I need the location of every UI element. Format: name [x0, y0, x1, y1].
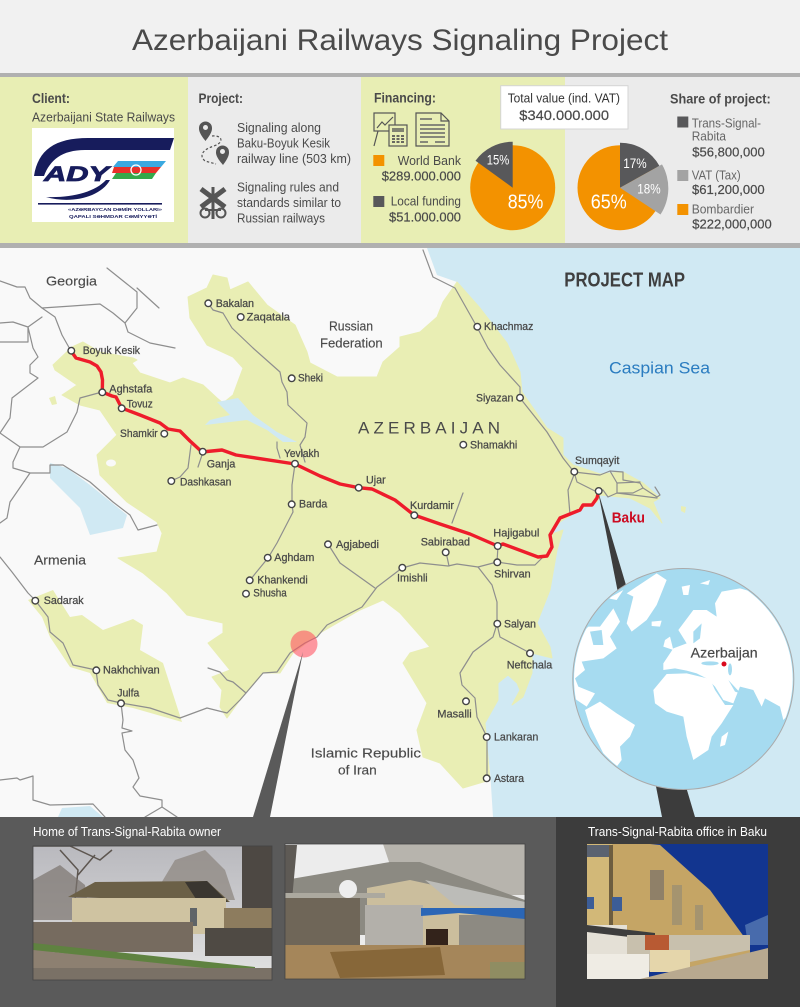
city labels: Hajigabul [493, 528, 539, 540]
country labels [34, 274, 500, 777]
city labels: Julfa [117, 688, 140, 700]
city labels: Astara [494, 773, 525, 785]
panel: home photos [0, 817, 556, 1007]
pie chart: share of project [578, 143, 668, 230]
city labels: Masalli [437, 708, 472, 720]
city labels: Agjabedi [336, 539, 379, 551]
icon: railway crossing [200, 187, 226, 219]
label: caspian sea: Caspian Sea [609, 358, 711, 377]
panel: client: Azerbaijani State Railways [32, 110, 175, 125]
country labels: AZERBAIJAN [358, 418, 500, 437]
legend: bombardier: $222,000,000 [692, 216, 772, 231]
project map [0, 248, 800, 817]
logo: ADY [32, 128, 174, 222]
panel: home photos: Home of Trans-Signal-Rabita owner [33, 825, 221, 839]
city labels: Dashkasan [180, 477, 231, 489]
country labels: Armenia [34, 552, 87, 567]
land: azerbaijan [53, 275, 662, 788]
small land spots [49, 396, 686, 513]
country labels: Georgia [46, 274, 98, 289]
country labels: Islamic Republic [311, 746, 422, 761]
label: baku: Baku [612, 510, 645, 527]
pointer: to home photos [253, 652, 303, 817]
marker: trans-signal-rabita home [290, 630, 318, 658]
info strip [0, 73, 800, 248]
legend: vat: VAT (Tax) [692, 167, 741, 182]
city labels: Khankendi [257, 574, 308, 586]
heading: project map: PROJECT MAP [564, 270, 685, 292]
city labels: Sumqayit [575, 455, 619, 467]
legend: trans-signal-rabita: Rabita [692, 129, 727, 144]
legend: world bank: $289.000.000 [382, 169, 461, 184]
legend: trans-signal-rabita: Trans-Signal- [692, 115, 761, 130]
pie chart: share of project: 65% [591, 191, 627, 213]
legend: trans-signal-rabita [677, 115, 765, 160]
legend: vat: $61,200,000 [692, 182, 765, 197]
pointer: to globe [598, 491, 695, 817]
logo: ADY: ADY [43, 163, 112, 186]
city labels: Kurdamir [410, 500, 454, 512]
pie chart: financing: 85% [508, 191, 543, 213]
panel: project: Signaling rules and [237, 180, 339, 195]
city labels: Aghstafa [109, 383, 153, 395]
city labels: Yevlakh [284, 448, 319, 460]
panel: project: Baku-Boyuk Kesik [237, 136, 330, 151]
country labels: Russian [329, 318, 373, 333]
photo: apartment block [587, 844, 768, 979]
city labels: Salyan [504, 619, 536, 631]
railway: main red line [71, 351, 599, 557]
lakes [50, 398, 297, 817]
panel: project: Project: [198, 90, 243, 106]
icon: chart board and calculator [374, 113, 407, 146]
water: caspian sea [427, 248, 800, 817]
borders and secondary rail lines [0, 250, 660, 817]
panel: project: standards similar to [237, 195, 341, 210]
land: nakhchivan [28, 590, 182, 722]
city labels: Tovuz [127, 399, 153, 411]
city labels: Sheki [298, 373, 323, 385]
pie chart: financing [470, 142, 555, 230]
city labels: Nakhchivan [103, 665, 160, 677]
country labels: of Iran [338, 762, 377, 777]
city labels: Siyazan [476, 393, 513, 405]
city labels: Shamkir [120, 428, 158, 440]
globe: Azerbaijan [691, 644, 758, 660]
globe [567, 568, 797, 790]
panel: project: railway line (503 km) [237, 151, 351, 166]
panel: client [0, 77, 188, 243]
marker: azerbaijan dot [722, 662, 726, 666]
panel: project: Russian railways [237, 211, 325, 226]
legend: local funding: $51.000.000 [389, 210, 461, 225]
panel: office photo [556, 817, 800, 1007]
city markers [32, 300, 602, 782]
title [0, 0, 800, 73]
panel: share of project: Share of project: [670, 90, 771, 106]
city labels: Shusha [253, 588, 287, 600]
legend: trans-signal-rabita: $56,800,000 [692, 145, 765, 160]
city labels: Barda [299, 499, 328, 511]
city labels: Boyuk Kesik [83, 345, 140, 357]
city labels: Aghdam [274, 552, 314, 564]
city labels: Khachmaz [484, 321, 533, 333]
city labels: Sabirabad [421, 537, 470, 549]
pie chart: share of project: 18% [637, 180, 661, 196]
city labels [44, 298, 619, 785]
legend: local funding [373, 194, 461, 225]
panel: project: Signaling along [237, 120, 321, 135]
callout: total value: $340.000.000 [519, 107, 609, 123]
city labels: Imishli [397, 573, 428, 585]
city labels: Ganja [207, 459, 236, 471]
panel: client: Client: [32, 90, 70, 106]
photo: house with fence [33, 846, 272, 980]
legend: bombardier: Bombardier [692, 201, 755, 216]
pie chart: financing: 15% [487, 152, 509, 168]
panel: share of project [565, 77, 800, 243]
pie chart: share of project: 17% [623, 155, 647, 171]
city labels: Neftchala [507, 659, 553, 671]
city labels: Bakalan [216, 298, 254, 310]
panel: office photo: Trans-Signal-Rabita office in Baku [588, 825, 767, 839]
panel: financing [361, 77, 565, 243]
icon: document [416, 113, 449, 146]
logo: ADY: QAPALI SƏHMDAR CƏMİYYƏTİ [69, 214, 157, 219]
callout: total value [501, 86, 628, 129]
country labels: Federation [320, 335, 383, 350]
logo: ADY: «AZƏRBAYCAN DƏMİR YOLLARI» [68, 207, 163, 212]
panel: financing: Financing: [374, 90, 436, 106]
panel: project [188, 77, 361, 243]
city labels: Zaqatala [247, 311, 291, 323]
legend: bombardier [677, 201, 772, 231]
city labels: Shamakhi [470, 439, 517, 451]
city labels: Sadarak [44, 595, 84, 607]
legend: vat [677, 167, 765, 197]
city labels: Ujar [366, 475, 386, 487]
photo: farmyard with cow [285, 844, 525, 979]
photo border strokes [33, 844, 525, 980]
title: Azerbaijani Railways Signaling Project [132, 24, 669, 57]
legend: local funding: Local funding [391, 194, 461, 209]
legend: world bank: World Bank [398, 153, 461, 168]
callout: total value: Total value (ind. VAT) [508, 91, 620, 106]
legend: world bank [373, 153, 461, 184]
city labels: Lankaran [494, 732, 538, 744]
icon: route pins [199, 122, 229, 165]
city labels: Shirvan [494, 569, 531, 581]
